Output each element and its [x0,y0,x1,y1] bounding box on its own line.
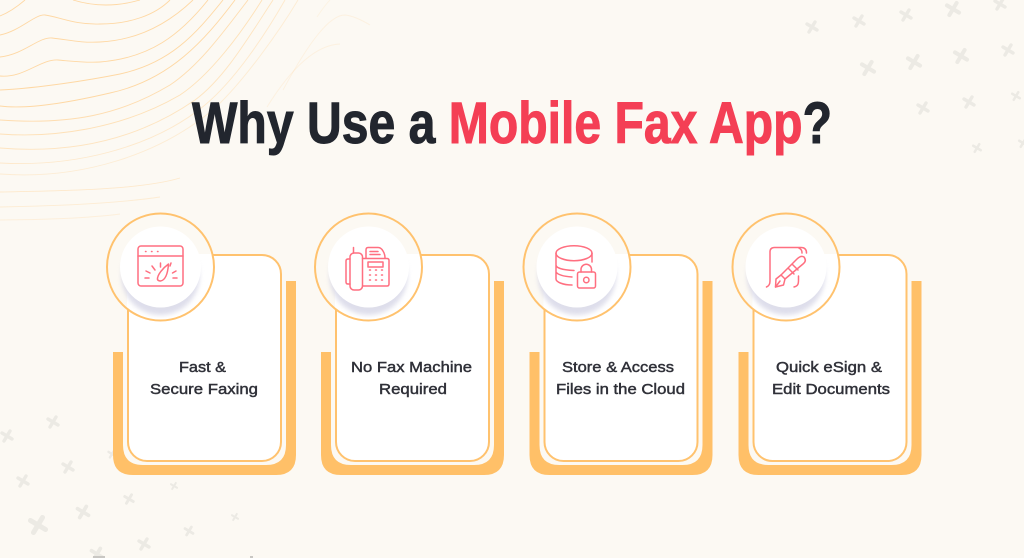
label: Secure Faxing [150,381,258,398]
card 4: quick esign and edit documents [732,214,922,475]
card 2: no fax machine required [315,214,504,475]
label: Edit Documents [772,381,890,398]
cross pattern: top right [807,0,1024,152]
card 3: store and access files in the cloud [524,214,712,475]
label: Files in the Cloud [556,381,685,398]
contour line pattern [0,0,370,220]
label: Store & Access [562,359,674,376]
label [150,359,258,398]
label [351,359,472,398]
title: Why Use a Mobile Fax App? [192,91,832,156]
icon: browser speed gauge [138,246,183,286]
icon: database with padlock [556,246,596,288]
label: Quick eSign & [776,359,882,376]
icon: document with pen [766,248,806,287]
label [772,359,890,398]
label: Required [379,381,447,398]
card 1: fast and secure faxing [107,214,296,475]
label: No Fax Machine [351,359,472,376]
icon: fax machine [346,248,389,290]
cross pattern: bottom left [2,417,253,558]
label [556,359,685,398]
label: Fast & [179,359,226,376]
